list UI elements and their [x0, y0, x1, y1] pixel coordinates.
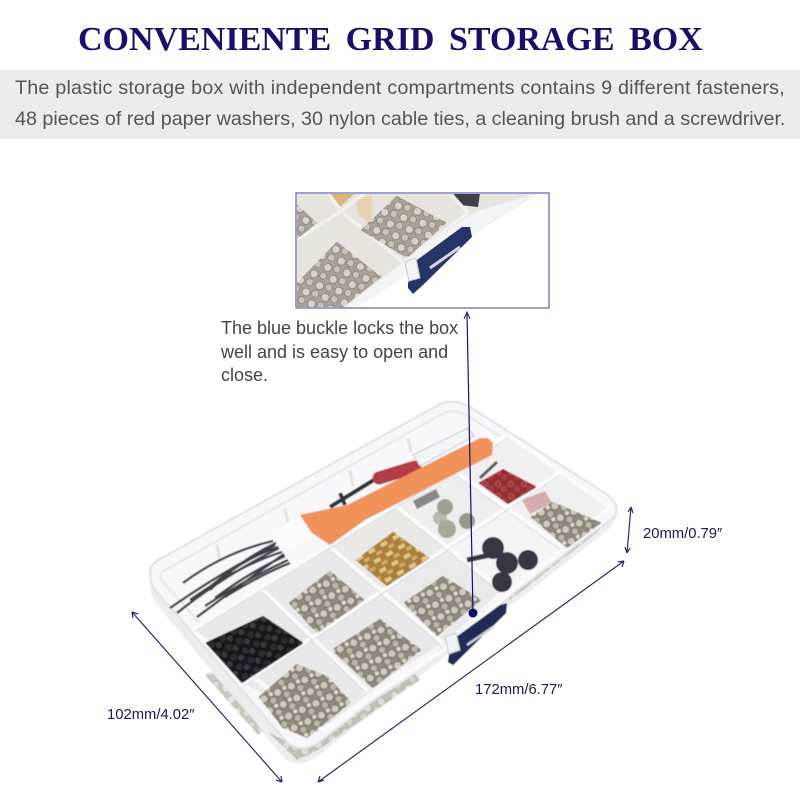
cleaning brush bristles [270, 516, 315, 552]
inset dividers [296, 193, 468, 262]
cluster: black screws [207, 617, 302, 682]
cluster: thumb screws silver [415, 493, 475, 538]
cluster: silver screws row one [333, 620, 420, 687]
blue buckle [445, 603, 507, 665]
inset screws lower [298, 243, 380, 306]
product illustration and dimension lines [131, 192, 634, 783]
inset faded brass [356, 196, 372, 222]
cluster: silver screws right [532, 503, 600, 547]
label: length: 172mm/6.77″ [475, 682, 562, 698]
buckle caption [221, 318, 458, 385]
zoomed inset of buckle [296, 193, 550, 308]
cluster: silver screws row two [290, 572, 363, 632]
title: CONVENIENTE GRID STORAGE BOX [78, 21, 703, 58]
arrow: length dimension [318, 561, 624, 782]
nylon cable ties [170, 541, 290, 617]
buckle caption: close. [221, 365, 268, 385]
inner floor [161, 411, 603, 733]
inset buckle [408, 227, 472, 294]
buckle caption: The blue buckle locks the box [221, 318, 458, 338]
cable tie heads [330, 478, 377, 507]
arrow: width dimension [132, 612, 282, 782]
label: height: 20mm/0.79″ [643, 526, 722, 542]
box lid outline [150, 402, 616, 748]
arrow: height dimension [625, 507, 633, 553]
description band: The plastic storage box with independent compartments contains 9 different fasteners, [15, 77, 785, 99]
leader line from buckle to inset [464, 312, 478, 618]
inset brass [331, 194, 354, 207]
cluster: silver screws centre [405, 577, 480, 635]
faded washers behind wall [522, 491, 552, 514]
screwdriver shaft [413, 428, 474, 466]
inset buckle slot [430, 247, 460, 268]
cluster: self-tapping screws [260, 665, 350, 737]
buckle caption: well and is easy to open and [221, 342, 448, 362]
cluster: brass standoffs [357, 533, 428, 585]
cluster: red paper washers [480, 470, 535, 503]
screws visible through front wall [205, 522, 603, 760]
small screw beneath handle [480, 462, 497, 478]
long compartment wall ticks [217, 438, 411, 560]
inset front wall [345, 193, 537, 308]
inset hinge [405, 258, 420, 281]
grid compartments [192, 435, 610, 730]
cluster: thumb screws black [467, 537, 538, 592]
inset screws left [296, 203, 317, 240]
orange brush handle [300, 438, 493, 545]
inset screws upper [362, 197, 445, 257]
description band [0, 70, 800, 139]
buckle hinge [445, 633, 460, 654]
plastic storage box [150, 402, 618, 764]
inset border [296, 193, 549, 308]
description band: 48 pieces of red paper washers, 30 nylon cable ties, a cleaning brush and a screwdriver. [15, 108, 785, 130]
box body shadow wall [150, 505, 618, 764]
inset black knob [453, 193, 480, 207]
label: width: 102mm/4.02″ [107, 707, 194, 723]
red washers tube [379, 467, 415, 478]
